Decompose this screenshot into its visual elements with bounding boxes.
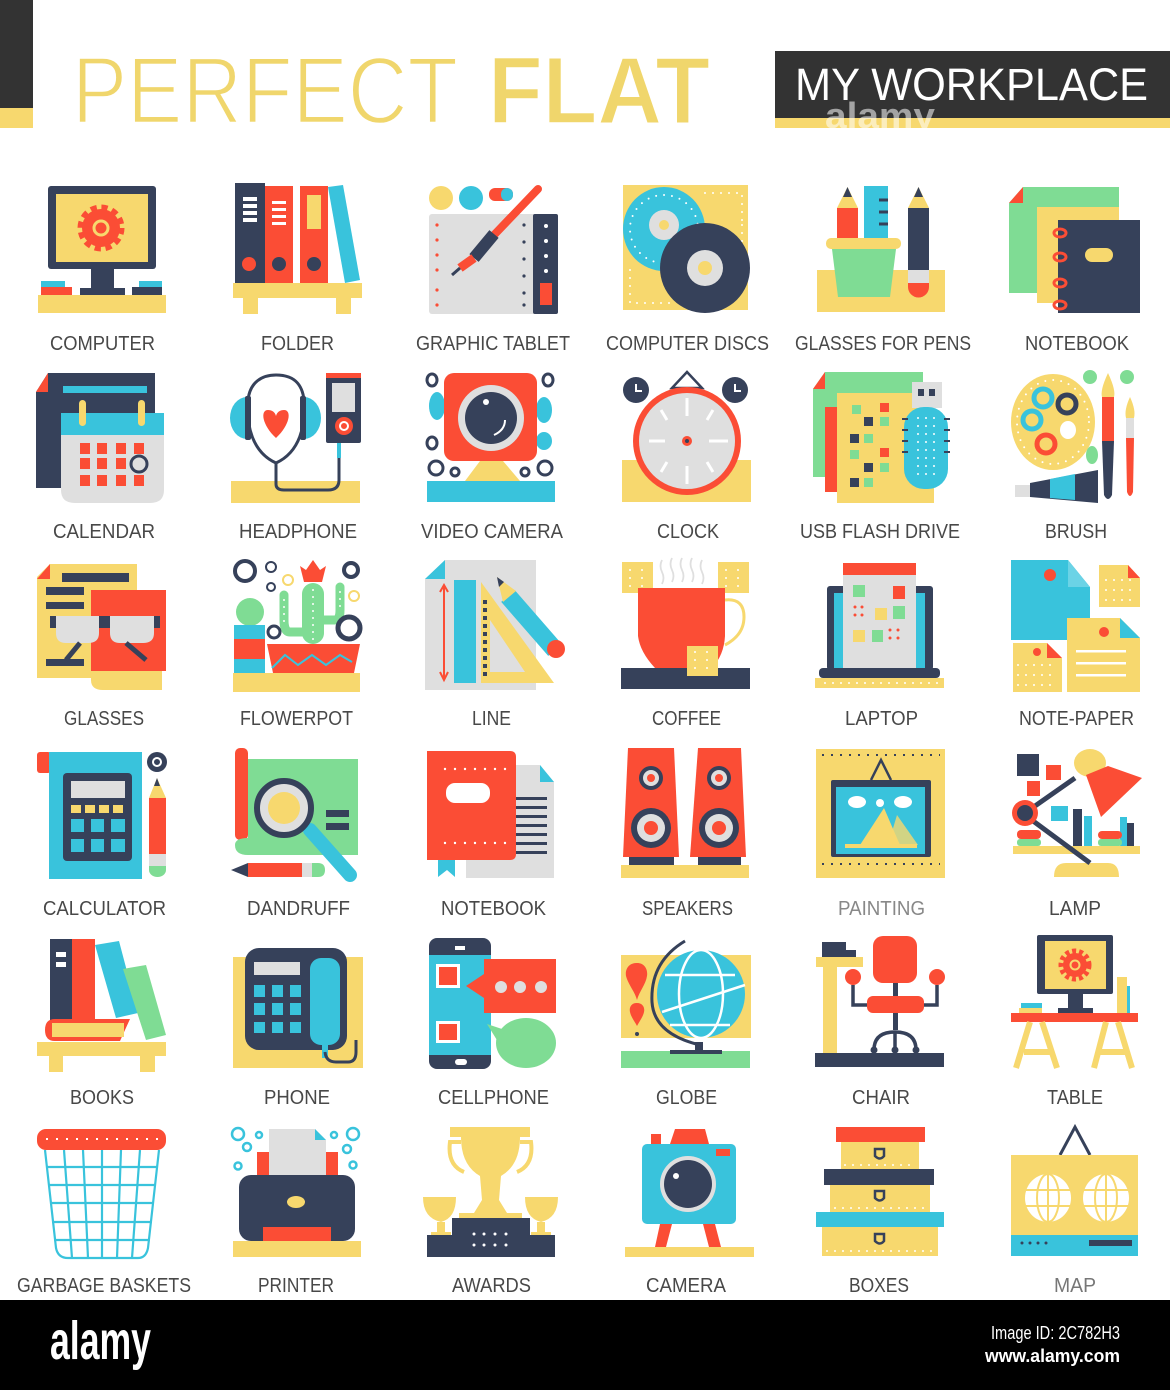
label: PRINTER: PRINTER — [258, 1275, 334, 1297]
icon: calendar — [36, 373, 164, 503]
icon: books — [37, 939, 166, 1072]
label: NOTEBOOK: NOTEBOOK — [441, 898, 547, 920]
icon: note-paper — [1011, 560, 1140, 692]
label: LINE: LINE — [472, 708, 511, 730]
label: CALENDAR: CALENDAR — [53, 521, 155, 543]
icon: camera — [625, 1129, 754, 1257]
icon: clock — [622, 372, 751, 502]
label: PAINTING: PAINTING — [838, 898, 925, 920]
icon: video camera — [427, 373, 555, 502]
label: BOXES: BOXES — [849, 1275, 909, 1297]
label: CLOCK: CLOCK — [657, 521, 720, 543]
label: GLASSES FOR PENS: GLASSES FOR PENS — [795, 333, 971, 355]
icon: globe — [621, 941, 751, 1068]
icon: painting — [816, 749, 945, 878]
icon: glasses for pens — [817, 186, 945, 312]
label: FLOWERPOT: FLOWERPOT — [240, 708, 353, 730]
icon: USB flash drive — [813, 372, 950, 503]
icon: map — [1011, 1127, 1138, 1256]
icon: notebook — [1009, 187, 1140, 313]
icon: folder — [233, 183, 362, 314]
icon: speakers — [621, 748, 749, 878]
icon: awards — [423, 1127, 558, 1257]
label: NOTEBOOK: NOTEBOOK — [1025, 333, 1130, 355]
icon: line — [425, 560, 565, 690]
icon: flowerpot — [233, 560, 360, 692]
label: LAMP: LAMP — [1049, 898, 1101, 920]
icon: cellphone — [429, 938, 556, 1069]
footer bar: Image ID: 2C782H3 — [991, 1323, 1120, 1343]
footer bar — [0, 1300, 1170, 1390]
label: USB FLASH DRIVE: USB FLASH DRIVE — [800, 521, 960, 543]
label: NOTE-PAPER: NOTE-PAPER — [1019, 708, 1134, 730]
banner: MY WORKPLACE: MY WORKPLACE — [795, 59, 1148, 110]
icon: glasses — [37, 564, 166, 690]
icon: laptop — [815, 563, 944, 688]
icon: boxes — [816, 1127, 944, 1256]
icon: coffee — [621, 558, 750, 689]
footer bar: www.alamy.com — [984, 1346, 1120, 1366]
title: PERFECT FLAT: FLAT — [488, 38, 710, 144]
label: VIDEO CAMERA: VIDEO CAMERA — [421, 521, 564, 543]
banner: MY WORKPLACE: alamy — [825, 95, 935, 136]
label: GRAPHIC TABLET: GRAPHIC TABLET — [416, 333, 570, 355]
label: GLOBE: GLOBE — [656, 1087, 717, 1109]
icon: garbage basket — [37, 1129, 166, 1258]
icon: graphic tablet — [429, 186, 558, 314]
icon: table — [1011, 935, 1138, 1068]
title: PERFECT FLAT — [72, 38, 710, 144]
label: AWARDS: AWARDS — [452, 1275, 531, 1297]
label: TABLE: TABLE — [1047, 1087, 1103, 1109]
label: COMPUTER DISCS: COMPUTER DISCS — [606, 333, 769, 355]
label: DANDRUFF: DANDRUFF — [247, 898, 350, 920]
icon: brush — [1011, 370, 1134, 503]
icon: headphone — [230, 373, 361, 503]
label: COFFEE: COFFEE — [652, 708, 721, 730]
label: HEADPHONE: HEADPHONE — [239, 521, 357, 543]
title: PERFECT FLAT: PERFECT — [72, 38, 458, 144]
icon: lamp — [1012, 749, 1142, 877]
icon: computer — [38, 186, 166, 313]
label: CALCULATOR: CALCULATOR — [43, 898, 166, 920]
icon: computer discs — [623, 185, 750, 313]
label: FOLDER: FOLDER — [261, 333, 334, 355]
label: SPEAKERS: SPEAKERS — [642, 898, 733, 920]
label: BRUSH: BRUSH — [1045, 521, 1107, 543]
label: CHAIR: CHAIR — [852, 1087, 910, 1109]
label: LAPTOP: LAPTOP — [845, 708, 918, 730]
label: BOOKS: BOOKS — [70, 1087, 134, 1109]
label: PHONE: PHONE — [264, 1087, 330, 1109]
header corner tab — [0, 0, 33, 128]
label: GARBAGE BASKETS: GARBAGE BASKETS — [17, 1275, 191, 1297]
icon: printer — [232, 1128, 361, 1257]
label: GLASSES: GLASSES — [64, 708, 144, 730]
label: CAMERA: CAMERA — [646, 1275, 727, 1297]
label: COMPUTER: COMPUTER — [50, 333, 155, 355]
icon: dandruff — [231, 748, 358, 877]
label: CELLPHONE: CELLPHONE — [438, 1087, 549, 1109]
footer bar: alamy — [50, 1311, 151, 1371]
label: MAP: MAP — [1054, 1275, 1096, 1297]
icon: phone — [233, 948, 363, 1068]
banner: MY WORKPLACE — [775, 51, 1170, 136]
icon: calculator — [37, 752, 167, 879]
icon: chair — [815, 936, 945, 1067]
icon: notebook with paper — [427, 751, 554, 878]
